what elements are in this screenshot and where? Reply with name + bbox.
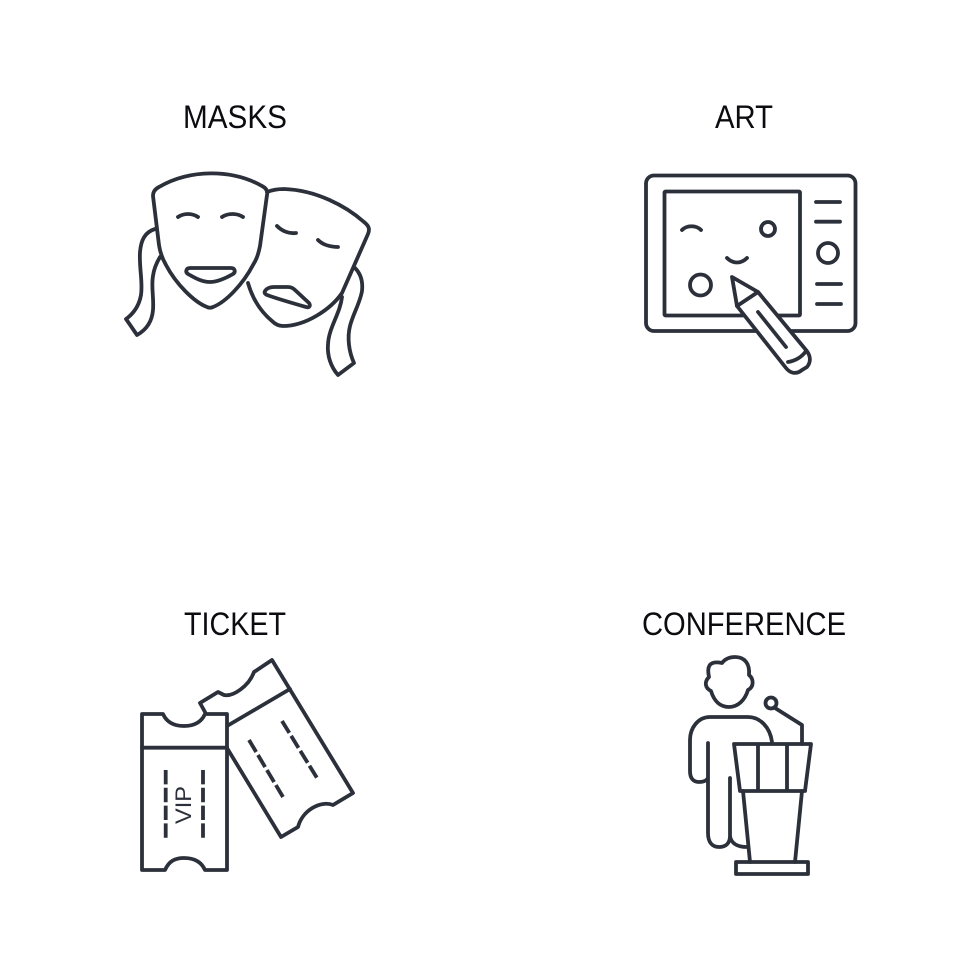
front mask eyes and mouth [178, 214, 243, 217]
tablet body [646, 176, 856, 331]
back ticket dashes [249, 721, 317, 797]
side buttons [816, 202, 841, 304]
heading: ticket: TICKET [184, 606, 286, 642]
left ribbon [126, 229, 160, 335]
icon: speaker at podium [690, 657, 811, 874]
icon: tickets [142, 660, 353, 870]
front mask [153, 173, 267, 308]
microphone [766, 698, 776, 708]
sketch on screen [682, 226, 747, 262]
head [706, 657, 753, 707]
front ticket [142, 714, 227, 870]
body [690, 717, 772, 847]
panel: ticket [142, 606, 353, 870]
panel: conference [642, 606, 846, 874]
icon: theatre masks [126, 173, 369, 375]
heading: art: ART [715, 99, 773, 135]
heading: conference: CONFERENCE [642, 606, 846, 642]
tablet screen [664, 192, 800, 316]
pencil [732, 277, 810, 373]
back mask [248, 189, 369, 326]
front ticket dashes [166, 770, 203, 838]
panel: masks [126, 99, 369, 375]
text: vip: VIP [171, 786, 196, 824]
heading: masks: MASKS [183, 99, 287, 135]
lectern top [734, 744, 811, 791]
lectern base [736, 862, 808, 874]
lectern stand [743, 791, 802, 862]
panel: art [646, 99, 856, 373]
icon: drawing tablet [646, 176, 856, 373]
back ticket [200, 660, 353, 837]
right ribbon [328, 268, 362, 375]
back mask eyes and mouth [277, 226, 338, 247]
